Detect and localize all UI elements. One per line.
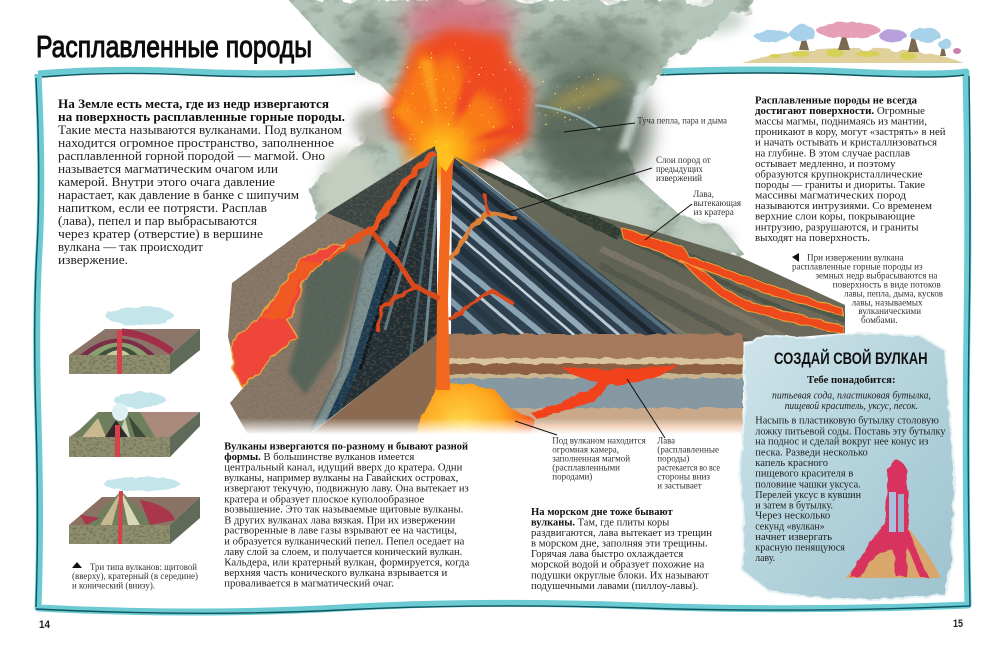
text block: intro: называется магматическим очагом или <box>58 162 278 176</box>
text block: undersea volcanoes: в морском дне, заполняя эти трещины. <box>531 538 708 550</box>
instructions: Через несколько <box>755 510 831 522</box>
instructions: красную пенящуюся <box>755 542 845 554</box>
materials: пищевой краситель, уксус, песок. <box>785 400 918 412</box>
caption: volcanic bombs with arrow: поверхность в виде потоков <box>833 280 941 290</box>
callout: layers of rock <box>656 155 711 183</box>
text block: eruption types: В других вулканах лава вязкая. При их извержении <box>224 514 455 526</box>
magma sill with feeder <box>532 365 678 419</box>
panel: build your own volcano <box>740 333 955 600</box>
text block: eruption types <box>224 440 469 590</box>
callout: lava from crater: Лава, <box>693 189 714 199</box>
text block: intro: Такие места называются вулканами. Под вулканом <box>58 123 342 137</box>
crater volcano <box>69 392 200 457</box>
callout: spreading lava: (расплавленные <box>657 444 719 454</box>
callout: magma chamber <box>552 436 646 482</box>
callout: magma chamber: огромная камера, <box>552 444 619 454</box>
materials: питьевая сода, пластиковая бутылка, <box>772 390 931 402</box>
instructions: половине чашки уксуса. <box>755 478 861 490</box>
callout: lava from crater: из кратера <box>694 207 734 217</box>
text block: eruption types: извергают текучую, подвижную лаву. Она вытекает из <box>224 483 469 495</box>
text block: intrusions <box>755 94 946 244</box>
callout leader lines <box>506 123 692 438</box>
heading: СОЗДАЙ СВОЙ ВУЛКАН <box>774 349 928 368</box>
text block: undersea volcanoes: подушки округлые блоки. Их называют <box>531 569 709 581</box>
text block: intrusions: остывает медленно, и поэтому <box>755 158 896 170</box>
text block: eruption types: Кальдера, или кратерный вулкан, формируется, когда <box>224 557 469 569</box>
instructions: ложку питьевой соды. Поставь эту бутылку <box>755 425 946 437</box>
text block: intro: камерой. Внутри этого очага давление <box>58 175 275 189</box>
instructions: и затем в бутылку. <box>755 499 833 511</box>
caption: volcanic bombs with arrow: бомбами. <box>861 315 898 325</box>
text block: intro: напитком, если ее потрясти. Расплав <box>58 201 267 215</box>
text block: undersea volcanoes <box>531 506 712 592</box>
text block: undersea volcanoes: раздвигаются, лава вытекает из трещин <box>531 527 712 539</box>
instructions: на поднос и сделай вокруг нее конус из <box>755 436 928 448</box>
callout: spreading lava: Лава <box>657 436 675 446</box>
text block: intrusions: породы — граниты и диориты. Такие <box>755 179 925 191</box>
caption: three types <box>72 562 198 590</box>
callout: magma chamber: Под вулканом находится <box>552 436 646 446</box>
text block: eruption types: центральный канал, идущий вверх до кратера. Одни <box>224 462 462 474</box>
text block: intrusions: верхние слои коры, покрывающие <box>755 211 915 223</box>
text block: undersea volcanoes: Горячая лава быстро охлаждается <box>531 548 683 560</box>
caption: three types: Три типа вулканов: щитовой <box>90 562 197 572</box>
text block: intrusions: интрузию, разрушаются, и граниты <box>755 221 919 233</box>
text block: intrusions: выходят на поверхность. <box>755 232 870 244</box>
text block: intro: На Земле есть места, где из недр извергаются <box>58 97 329 111</box>
brown strata left of conduit <box>307 334 440 437</box>
text block: eruption types: и образуется вулканический пепел. Пепел оседает на <box>224 535 464 547</box>
volcano cloud of ash <box>289 0 755 262</box>
text block: eruption types: Вулканы извергаются по-разному и бывают разной <box>224 440 469 452</box>
text block: undersea volcanoes: подушечными лавами (пиллоу-лавы). <box>531 580 699 592</box>
magma chamber <box>413 382 535 434</box>
text block: eruption types: проваливается в магматический очаг. <box>224 578 394 590</box>
instructions: пищевого красителя в <box>755 468 853 480</box>
callout: magma chamber: породами) <box>552 472 592 482</box>
strata block <box>447 334 743 434</box>
text block: eruption types: формы. В большинстве вулканов имеется <box>224 451 414 463</box>
cone volcano <box>69 477 200 544</box>
crater glow <box>435 146 455 172</box>
icon: decorative volcano strip <box>742 22 964 63</box>
instructions: лаву. <box>755 552 775 564</box>
text block: intro: находится огромное пространство, заполненное <box>58 136 334 150</box>
right flank of the volcano <box>454 156 850 345</box>
callout: lava from crater: вытекающая <box>694 198 741 208</box>
text block: intrusions: образуются крупнокристаллические <box>755 168 923 180</box>
instructions: капель красного <box>755 457 828 469</box>
text block: eruption types: растворенные в лаве газы взрывают ее на частицы, <box>224 525 457 537</box>
text block: eruption types: вулканы, например вулканы на Гавайских островах, <box>224 472 459 484</box>
text block: eruption types: верхняя часть конического вулкана взрывается и <box>224 567 447 579</box>
left lava flow <box>232 152 434 388</box>
text block: intrusions: называются интрузиями. Со временем <box>755 200 932 212</box>
text block: intrusions: и начать остывать и кристаллизоваться <box>755 137 937 149</box>
callout: spreading lava: породы) <box>657 454 689 464</box>
text block: intro: через кратер (отверстие) в вершине <box>58 227 263 241</box>
caption: volcanic bombs with arrow: лавы, пепла, дыма, кусков <box>844 289 943 299</box>
page number left: 14 <box>39 619 51 631</box>
instructions: секунд «вулкан» <box>755 520 825 532</box>
eruption plume <box>385 0 600 196</box>
callout: ash cloud: Туча пепла, пара и дыма <box>637 116 727 126</box>
materials: Тебе понадобится: <box>807 374 896 386</box>
instructions: начнет извергать <box>755 531 832 543</box>
text block: intro: вулкана — так происходит <box>58 240 203 254</box>
text block: eruption types: кратера и образует плоское куполообразное <box>224 493 424 505</box>
diagram: three volcano types <box>69 307 200 590</box>
text block: intro: на поверхность расплавленные горные породы. <box>58 110 345 124</box>
callout: spreading lava: и застывает <box>657 480 702 490</box>
text block: intro: (лава), пепел и пар выбрасываются <box>58 214 257 228</box>
caption: three types: (вверху), кратерный (в середине) <box>72 571 198 581</box>
left flank of the volcano <box>228 146 437 437</box>
cut section: layered strata right of conduit <box>451 158 678 336</box>
branching dykes <box>372 194 515 330</box>
callout: layers of rock: Слои пород от <box>656 155 711 165</box>
instructions <box>755 415 946 564</box>
text block: undersea volcanoes: морской водой и образует похожие на <box>531 559 704 571</box>
callout: layers of rock: предыдущих <box>656 164 703 174</box>
text block: intrusions: массы магмы, поднимаясь из мантии, <box>755 116 927 128</box>
caption: three types: и конический (внизу). <box>72 580 155 590</box>
text block: intrusions: проникают в кору, могут «застрять» в ней <box>755 126 946 138</box>
text block: intrusions: достигают поверхности. Огромные <box>755 105 925 117</box>
text block: intro: расплавленной горной породой — магмой. Оно <box>58 149 325 163</box>
caption: volcanic bombs with arrow: При извержении вулкана <box>807 252 904 262</box>
caption: volcanic bombs with arrow <box>792 252 943 325</box>
right lava flow <box>620 227 843 334</box>
shield volcano <box>69 307 200 374</box>
icon: model volcano <box>846 460 941 578</box>
page number right: 15 <box>953 618 963 630</box>
instructions: песка. Разведи несколько <box>755 446 868 458</box>
text block: intrusions: Расплавленные породы не всегда <box>755 94 917 106</box>
title: Расплавленные породы <box>36 29 312 64</box>
text block: intro: нарастает, как давление в банке с шипучим <box>58 188 299 202</box>
callout: spreading lava: стороны вниз <box>657 472 710 482</box>
text block: eruption types: лаву слой за слоем, и получается конический вулкан. <box>224 546 463 558</box>
caption: volcanic bombs with arrow: вулканическими <box>858 306 921 316</box>
callout: spreading lava: растекается во все <box>657 462 720 472</box>
text block: eruption types: возвышение. Это так называемые щитовые вулканы. <box>224 504 464 516</box>
text block: undersea volcanoes: На морском дне тоже бывают <box>531 506 673 518</box>
instructions: Перелей уксус в кувшин <box>755 489 861 501</box>
text block: intrusions: массивы магматических пород <box>755 190 906 202</box>
cut section: dark layers left of conduit <box>309 149 437 434</box>
materials <box>772 374 931 412</box>
callout: layers of rock: извержений <box>656 173 702 183</box>
central conduit <box>435 146 455 390</box>
callout: spreading lava <box>657 436 720 490</box>
frame <box>35 70 970 613</box>
text block: undersea volcanoes: вулканы. Там, где плиты коры <box>531 516 670 528</box>
text block: intro <box>58 97 345 267</box>
bottom fade of the illustration <box>215 418 745 440</box>
caption: volcanic bombs with arrow: расплавленные горные породы из <box>792 262 923 272</box>
caption: volcanic bombs with arrow: земных недр выбрасываются на <box>816 271 937 281</box>
callout: magma chamber: (расплавленными <box>552 462 620 472</box>
callout: lava from crater <box>693 189 741 217</box>
caption: volcanic bombs with arrow: лавы, называемых <box>852 297 923 307</box>
callout: magma chamber: заполненная магмой <box>552 454 630 464</box>
instructions: Насыпь в пластиковую бутылку столовую <box>755 415 939 427</box>
illustration: erupting volcano <box>215 0 850 440</box>
text block: intro: извержение. <box>58 253 128 267</box>
text block: intrusions: на глубине. В этом случае расплав <box>755 147 910 159</box>
